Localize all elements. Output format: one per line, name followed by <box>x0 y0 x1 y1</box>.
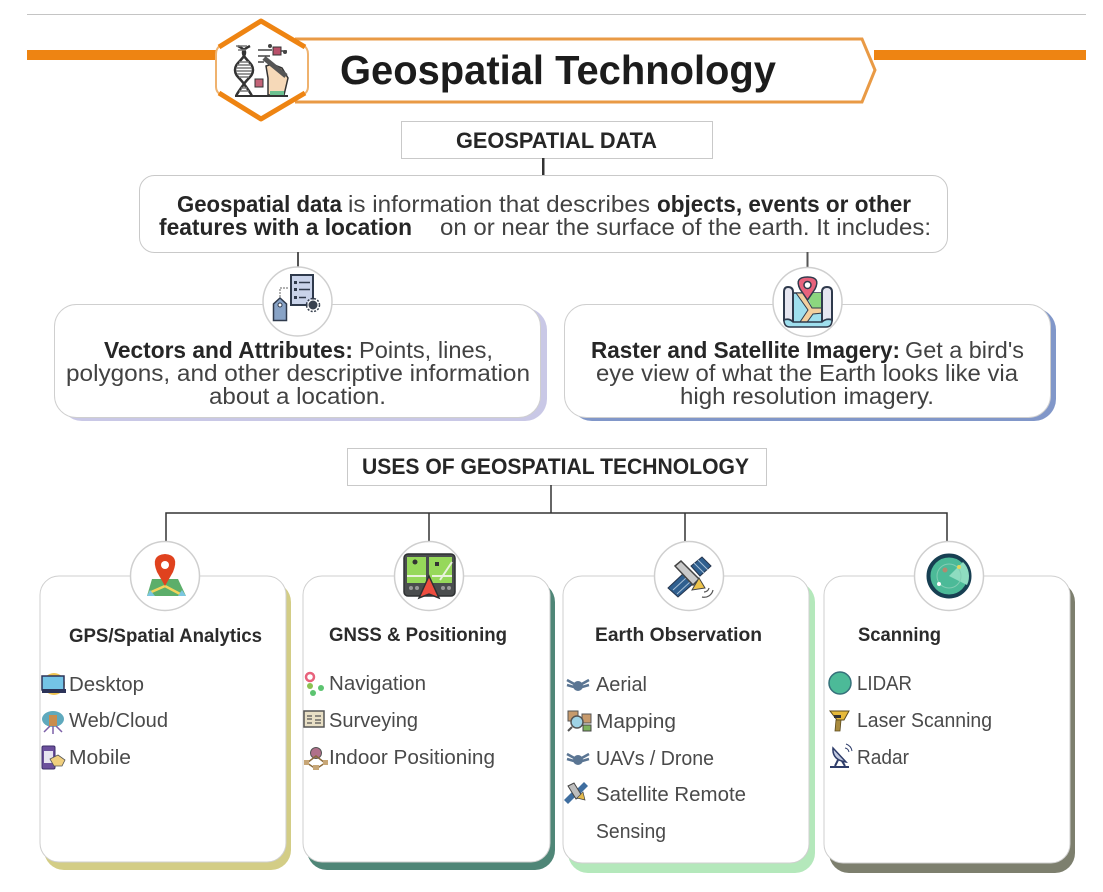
panel: earth observation: Satellite Remote <box>596 784 746 806</box>
title: Geospatial Technology <box>340 47 776 93</box>
icon: mapping <box>568 711 591 731</box>
icon: map pin <box>130 542 200 610</box>
panel: vectors and attributes <box>54 267 547 421</box>
definition panel: on or near the surface of the earth. It includes: <box>440 214 931 240</box>
icon: radar dish <box>830 744 852 767</box>
panel: GNSS and positioning: Indoor Positioning <box>329 747 495 769</box>
panel: earth observation: Mapping <box>596 711 676 733</box>
definition panel: features with a location <box>159 214 412 240</box>
panel: GNSS and positioning: Surveying <box>329 710 418 732</box>
heading: geospatial data: GEOSPATIAL DATA <box>456 128 657 153</box>
panel: GPS / spatial analytics <box>40 542 291 870</box>
panel: raster and satellite imagery: Get a bird's <box>905 337 1024 363</box>
icon: map with pin <box>773 268 842 336</box>
panel: raster and satellite imagery: high resolution imagery. <box>680 383 934 409</box>
icon: indoor positioning <box>304 748 328 770</box>
panel: scanning: Laser Scanning <box>857 710 992 732</box>
panel: GNSS and positioning: GNSS & Positioning <box>329 625 507 646</box>
panel: scanning <box>824 542 1075 873</box>
heading: geospatial data <box>402 122 712 158</box>
panel: GPS / spatial analytics: Desktop <box>69 674 144 696</box>
panel: scanning: Radar <box>857 747 909 769</box>
heading: uses of geospatial technology: USES OF GEOSPATIAL TECHNOLOGY <box>362 454 749 479</box>
panel: vectors and attributes: Vectors and Attributes: <box>104 337 353 363</box>
panel: vectors and attributes: about a location. <box>209 383 386 409</box>
panel: earth observation: Earth Observation <box>595 625 762 646</box>
panel: GPS / spatial analytics: GPS/Spatial Analytics <box>69 626 262 647</box>
panel: earth observation: UAVs / Drone <box>596 748 714 770</box>
panel: raster and satellite imagery: eye view of what the Earth looks like via <box>596 360 1018 386</box>
panel: GPS / spatial analytics: Mobile <box>69 747 131 769</box>
icon: mobile <box>42 746 65 769</box>
panel: raster and satellite imagery <box>564 268 1056 421</box>
panel: GNSS and positioning <box>303 542 555 870</box>
icon: aerial drone <box>567 680 589 691</box>
icon: navigation route <box>306 673 324 696</box>
panel: raster and satellite imagery: Raster and Satellite Imagery: <box>591 337 900 363</box>
title banner <box>27 20 1086 120</box>
panel: vectors and attributes: Points, lines, <box>359 337 493 363</box>
icon: navigation device <box>394 542 464 610</box>
icon: desktop <box>42 673 66 695</box>
panel: vectors and attributes: polygons, and other descriptive information <box>66 360 530 386</box>
icon: small satellite <box>564 782 588 804</box>
panel: earth observation <box>563 542 815 873</box>
icon: lidar <box>829 672 851 694</box>
icon: satellite <box>654 542 724 610</box>
icon: surveying <box>304 711 324 727</box>
definition panel: Geospatial data <box>177 191 342 217</box>
panel: GNSS and positioning: Navigation <box>329 673 426 695</box>
icon: radar <box>914 542 984 610</box>
icon: cloud <box>42 711 64 734</box>
panel: scanning: LIDAR <box>857 673 912 695</box>
heading: uses of geospatial technology <box>348 448 766 486</box>
definition panel: is information that describes <box>348 191 650 217</box>
icon: drone <box>567 754 589 765</box>
definition panel: objects, events or other <box>657 191 911 217</box>
panel: GPS / spatial analytics: Web/Cloud <box>69 710 168 732</box>
panel: scanning: Scanning <box>858 625 941 646</box>
icon: laser scanner <box>830 711 849 731</box>
definition panel <box>140 176 948 252</box>
icon: attribute list and tag <box>263 267 332 336</box>
panel: earth observation: Aerial <box>596 674 647 696</box>
icon: DNA and hand <box>235 44 288 97</box>
connector lines <box>166 485 947 541</box>
text: sensing: Sensing <box>596 821 666 843</box>
